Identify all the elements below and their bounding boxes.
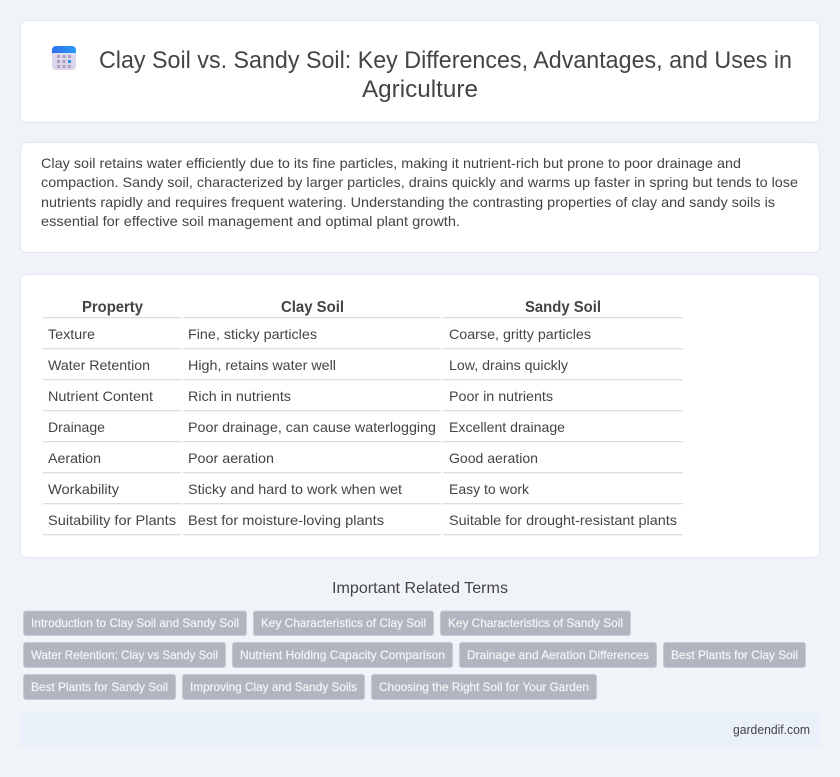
tag bbox=[440, 611, 630, 636]
tag: Best Plants for Sandy Soil bbox=[31, 680, 168, 694]
row: drainage bbox=[43, 419, 683, 442]
tag bbox=[232, 642, 452, 668]
title: Agriculture bbox=[362, 76, 478, 103]
row: nutrient content bbox=[43, 388, 683, 411]
row: nutrient content: Poor in nutrients bbox=[449, 388, 553, 404]
row: workability: Easy to work bbox=[449, 481, 530, 497]
tag bbox=[254, 611, 434, 636]
summary text: compaction. Sandy soil, characterized by larger particles, drains quickly and warms up faster in spring but tends to lose bbox=[41, 174, 798, 190]
tag: Best Plants for Clay Soil bbox=[671, 648, 798, 662]
row: drainage: Excellent drainage bbox=[449, 419, 565, 435]
panel: title header bbox=[20, 20, 820, 122]
tag: Drainage and Aeration Differences bbox=[467, 648, 649, 662]
row: aeration bbox=[43, 450, 683, 473]
panel: summary paragraph bbox=[20, 142, 820, 252]
row: suitability for plants bbox=[43, 512, 683, 535]
row: nutrient content: Rich in nutrients bbox=[188, 388, 291, 404]
footer bbox=[20, 713, 820, 747]
row: water retention: Water Retention bbox=[48, 357, 150, 373]
row: suitability for plants: Suitability for Plants bbox=[48, 512, 176, 528]
row: drainage: Drainage bbox=[48, 419, 105, 435]
title: Clay Soil vs. Sandy Soil: Key Differences, Advantages, and Uses in bbox=[99, 47, 792, 74]
table header row bbox=[43, 299, 683, 318]
row: suitability for plants: Suitable for drought-resistant plants bbox=[449, 512, 677, 528]
summary text: Clay soil retains water efficiently due to its fine particles, making it nutrient-rich but prone to poor drainage and bbox=[41, 155, 741, 171]
row: water retention: Low, drains quickly bbox=[449, 357, 568, 373]
tag bbox=[664, 642, 806, 668]
heading: important related terms: Important Related Terms bbox=[332, 580, 508, 597]
tag: Key Characteristics of Clay Soil bbox=[261, 616, 426, 630]
row: workability: Workability bbox=[48, 481, 119, 497]
row: water retention: High, retains water well bbox=[188, 357, 336, 373]
panel: comparison table bbox=[20, 274, 820, 558]
icon: calendar bbox=[52, 46, 76, 70]
tag bbox=[24, 642, 226, 668]
tag bbox=[182, 674, 364, 700]
row: aeration: Aeration bbox=[48, 450, 101, 466]
tag: Introduction to Clay Soil and Sandy Soil bbox=[31, 616, 239, 630]
tag bbox=[24, 674, 176, 700]
tag: Nutrient Holding Capacity Comparison bbox=[240, 648, 445, 662]
tag: Key Characteristics of Sandy Soil bbox=[448, 616, 623, 630]
tag bbox=[460, 642, 656, 668]
row: drainage: Poor drainage, can cause waterlogging bbox=[188, 419, 436, 435]
tag: Choosing the Right Soil for Your Garden bbox=[379, 680, 589, 694]
summary text bbox=[41, 155, 798, 229]
summary text: nutrients rapidly and requires frequent watering. Understanding the contrasting properties of clay and sandy soils is bbox=[41, 194, 775, 210]
row: texture: Coarse, gritty particles bbox=[449, 326, 591, 342]
row: water retention bbox=[43, 357, 683, 380]
row: texture: Texture bbox=[48, 326, 95, 342]
related term tags bbox=[24, 611, 806, 700]
table header row: Sandy Soil bbox=[525, 299, 601, 316]
row: suitability for plants: Best for moisture-loving plants bbox=[188, 512, 384, 528]
row: aeration: Good aeration bbox=[449, 450, 538, 466]
title bbox=[99, 47, 792, 103]
tag bbox=[24, 611, 246, 636]
row: workability: Sticky and hard to work when wet bbox=[188, 481, 402, 497]
row: nutrient content: Nutrient Content bbox=[48, 388, 153, 404]
summary text: essential for effective soil management and optimal plant growth. bbox=[41, 213, 460, 229]
row: workability bbox=[43, 481, 683, 504]
table header row: Clay Soil bbox=[281, 299, 344, 316]
tag bbox=[372, 674, 596, 700]
row: aeration: Poor aeration bbox=[188, 450, 274, 466]
row: texture: Fine, sticky particles bbox=[188, 326, 317, 342]
table header row: Property bbox=[82, 299, 143, 316]
row: texture bbox=[43, 326, 683, 349]
footer: gardendif.com bbox=[733, 722, 810, 737]
tag: Water Retention: Clay vs Sandy Soil bbox=[31, 648, 218, 662]
tag: Improving Clay and Sandy Soils bbox=[190, 680, 357, 694]
